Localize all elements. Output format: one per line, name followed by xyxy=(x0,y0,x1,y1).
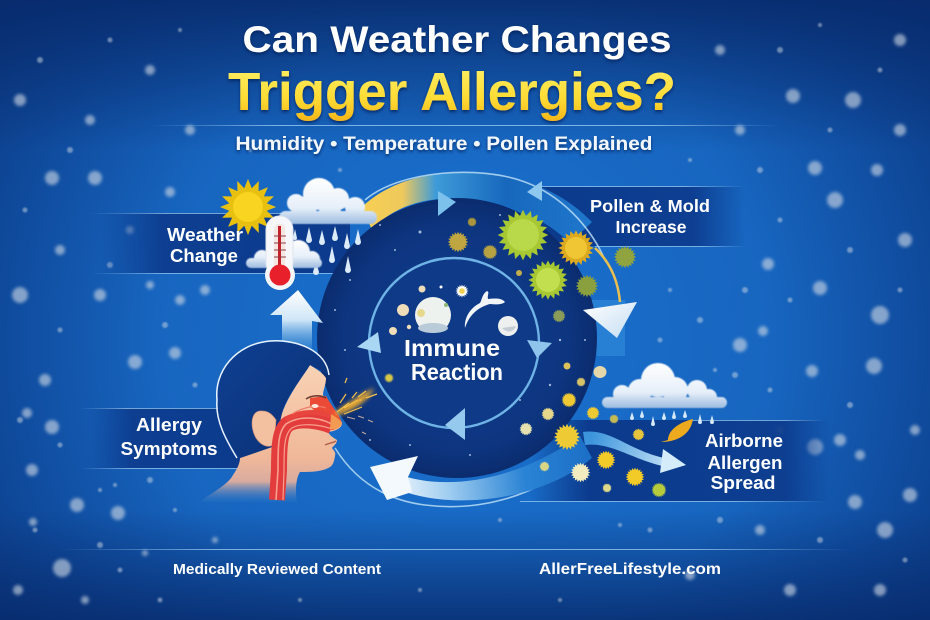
arrow: up to weather xyxy=(270,290,323,350)
label: immune reaction xyxy=(404,335,503,385)
pollen particles xyxy=(448,210,666,498)
cycle outer arc: top xyxy=(362,172,592,243)
label: weather change: Weather xyxy=(167,224,243,245)
ear xyxy=(252,411,276,446)
red nasal airway xyxy=(276,406,332,500)
footer: reviewed: Medically Reviewed Content xyxy=(173,561,381,578)
icon: cloud upper xyxy=(279,178,377,224)
label: allergy symptoms: Allergy xyxy=(136,415,202,435)
cycle lower right band xyxy=(590,300,625,356)
icon: sun xyxy=(220,179,276,235)
bottom arc band with arrow xyxy=(370,436,592,500)
title: Can Weather Changes xyxy=(242,19,672,60)
eye xyxy=(312,404,318,408)
label: airborne allergen spread: Allergen xyxy=(708,453,782,473)
label: weather change: Change xyxy=(170,245,238,266)
inner ring xyxy=(357,258,552,440)
red nose and eye zone xyxy=(310,396,342,430)
arrow: airborne swirl xyxy=(583,432,686,473)
label: weather change xyxy=(167,224,243,266)
panel: pollen ribbon xyxy=(540,186,745,247)
label: allergy symptoms: Symptoms xyxy=(120,439,218,459)
icon: rain drops xyxy=(293,226,361,275)
dark core circle xyxy=(317,198,597,478)
icon: autumn leaf xyxy=(661,419,693,442)
label: allergy symptoms xyxy=(120,415,218,459)
head with airway xyxy=(200,341,342,502)
core star speckle xyxy=(334,214,586,456)
nose tip xyxy=(330,414,342,429)
cycle outer thin edge xyxy=(335,172,606,507)
panel: airborne ribbon xyxy=(520,420,830,502)
hair xyxy=(218,342,328,458)
subtitle: Humidity • Temperature • Pollen Explained xyxy=(236,133,652,155)
label: pollen and mold: Increase xyxy=(616,217,687,237)
top band arrow head xyxy=(438,191,456,216)
label: airborne allergen spread xyxy=(705,431,783,493)
label: airborne allergen spread: Airborne xyxy=(705,431,783,451)
panel: allergy symptoms ribbon xyxy=(80,408,260,469)
label: airborne allergen spread: Spread xyxy=(710,473,776,493)
footer: website: AllerFreeLifestyle.com xyxy=(539,561,721,578)
hair outline xyxy=(217,341,329,458)
icon: small cloud xyxy=(246,240,322,268)
label: pollen and mold xyxy=(590,196,710,237)
face and neck xyxy=(200,365,342,502)
label: immune reaction: Reaction xyxy=(411,359,503,385)
footer rule xyxy=(60,549,850,550)
top rule xyxy=(150,125,780,126)
label: pollen and mold: Pollen & Mold xyxy=(590,196,710,216)
thin yellow arc to pollen arrow xyxy=(595,248,620,302)
icon: thermometer xyxy=(265,216,295,290)
lips xyxy=(325,441,336,445)
panel: weather change ribbon xyxy=(90,213,350,274)
sneeze spray xyxy=(335,374,393,434)
top right arrow head xyxy=(527,181,542,201)
title: Trigger Allergies? xyxy=(228,62,676,122)
label: immune reaction: Immune xyxy=(404,335,500,361)
brow xyxy=(306,396,326,399)
arrow: down to airborne xyxy=(583,302,637,338)
title xyxy=(228,19,676,122)
immune cell illustration xyxy=(389,284,518,336)
icon: rain cloud right xyxy=(602,363,727,426)
